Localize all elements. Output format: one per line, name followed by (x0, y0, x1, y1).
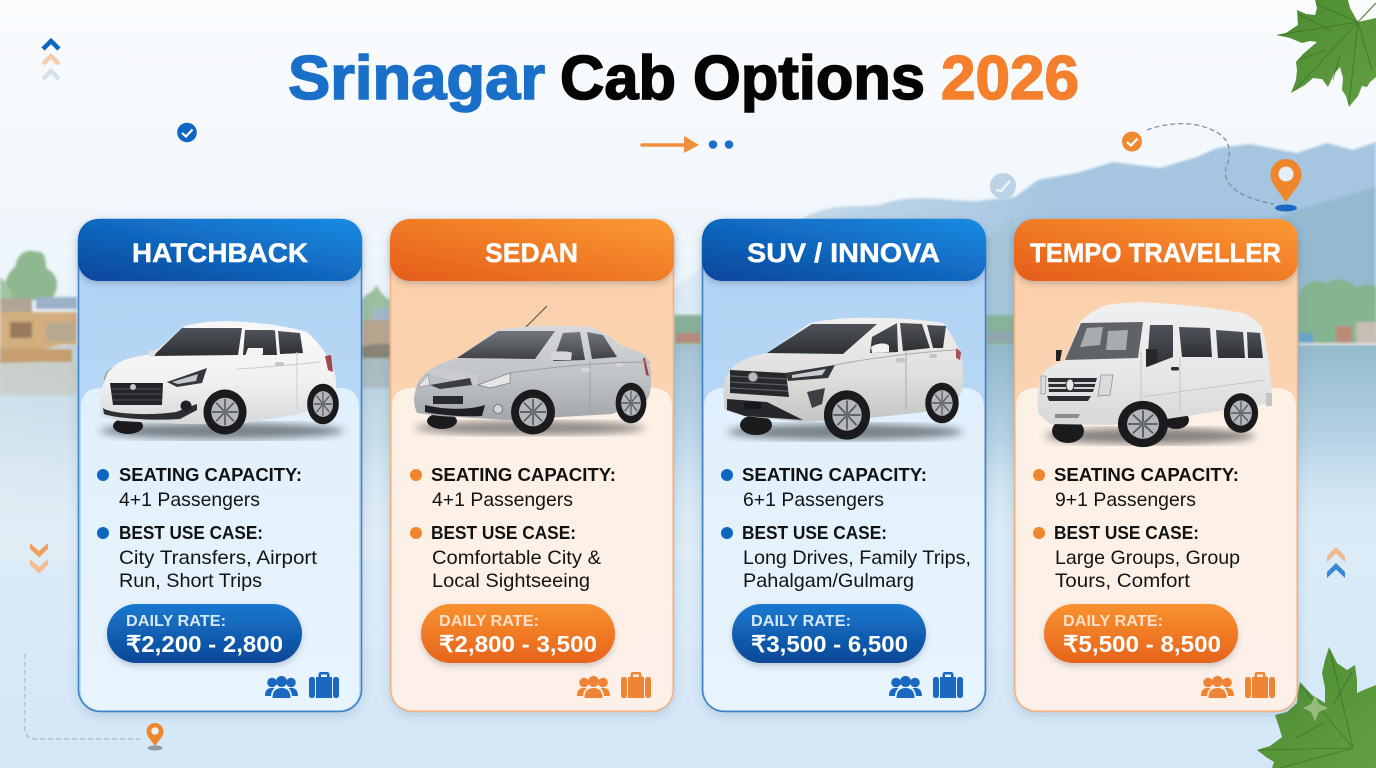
seating capacity: 9+1 Passengers (1055, 489, 1196, 511)
seating capacity (97, 465, 302, 511)
daily rate pill: ₹3,500 - 6,500 (751, 631, 908, 657)
dashed route to pin (1147, 124, 1274, 204)
scenery: left trees and houseboat (0, 251, 77, 395)
best use case (721, 523, 971, 592)
best use case: City Transfers, Airport (119, 547, 318, 569)
icon: faded check badge (990, 173, 1016, 199)
leaf: bottom right (1257, 647, 1376, 768)
best use case: Long Drives, Family Trips, (743, 547, 971, 569)
icon: orange check badge (1122, 132, 1142, 152)
icon: luggage (309, 672, 339, 698)
seating capacity: 6+1 Passengers (743, 489, 884, 511)
icon: map pin top right (1270, 159, 1302, 212)
seating capacity: SEATING CAPACITY: (1054, 465, 1239, 485)
arrow and dots under title (642, 136, 733, 153)
panel: SUV / Innova (702, 219, 986, 712)
icon: map pin bottom left (146, 723, 164, 750)
daily rate pill: DAILY RATE: (1063, 613, 1163, 630)
daily rate pill (107, 604, 302, 663)
best use case: Local Sightseeing (432, 570, 590, 592)
header (390, 219, 674, 281)
header: SEDAN (485, 238, 578, 268)
header: TEMPO TRAVELLER (1030, 238, 1281, 268)
daily rate pill: DAILY RATE: (751, 613, 851, 630)
panel: tempo traveller (1014, 219, 1298, 712)
daily rate pill: ₹5,500 - 8,500 (1063, 631, 1221, 657)
seating capacity: 4+1 Passengers (119, 489, 260, 511)
daily rate pill: ₹2,800 - 3,500 (439, 631, 597, 657)
lower panel (81, 388, 359, 710)
header (702, 219, 986, 281)
seating capacity (410, 465, 616, 511)
best use case: BEST USE CASE: (1054, 523, 1199, 543)
best use case: BEST USE CASE: (431, 523, 576, 543)
title: 2026 (941, 44, 1079, 113)
lower panel (704, 388, 984, 710)
leaf: top right (1276, 0, 1376, 107)
scenery: gap between cards one and two (362, 285, 390, 388)
best use case: BEST USE CASE: (742, 523, 887, 543)
icon: chevrons top left (43, 41, 59, 79)
seating capacity: SEATING CAPACITY: (742, 465, 927, 485)
title (288, 44, 1079, 113)
header (78, 219, 362, 281)
panel: sedan (390, 219, 674, 712)
scenery: right trees and houses (1298, 280, 1376, 345)
daily rate pill: DAILY RATE: (126, 613, 226, 630)
car: silver sedan (414, 306, 651, 435)
daily rate pill: DAILY RATE: (439, 613, 539, 630)
lower panel (1016, 388, 1296, 710)
icon: blue check badge (177, 123, 197, 142)
title: Srinagar (288, 44, 545, 113)
icon: chevrons left (30, 543, 48, 574)
icon: luggage (1245, 672, 1275, 698)
dashed route bottom left (25, 654, 140, 739)
icon: people (1201, 676, 1234, 698)
seating capacity (1033, 465, 1239, 511)
best use case: BEST USE CASE: (119, 523, 263, 543)
scenery: lake (0, 345, 1376, 560)
scenery: mountains (660, 142, 1376, 345)
seating capacity: 4+1 Passengers (432, 489, 573, 511)
best use case (410, 523, 601, 592)
panel: hatchback (78, 219, 362, 712)
icon: people (577, 676, 610, 698)
icon: chevrons right (1327, 547, 1345, 578)
car: silver Innova (723, 318, 963, 440)
icon: people (265, 676, 298, 698)
scenery: gaps between cards two, three and four (674, 315, 1014, 345)
best use case: Tours, Comfort (1055, 570, 1191, 592)
header: HATCHBACK (132, 238, 309, 268)
best use case: Pahalgam/Gulmarg (743, 570, 914, 592)
best use case: Run, Short Trips (119, 570, 262, 592)
best use case: Large Groups, Group (1055, 547, 1240, 569)
seating capacity: SEATING CAPACITY: (119, 465, 302, 485)
daily rate pill (421, 604, 615, 663)
title: Cab Options (560, 44, 925, 113)
daily rate pill: ₹2,200 - 2,800 (126, 631, 283, 657)
header (1014, 219, 1298, 281)
daily rate pill (732, 604, 926, 663)
best use case: Comfortable City & (432, 547, 601, 569)
icon: luggage (933, 672, 963, 698)
car: white hatchback (100, 321, 344, 439)
vehicle: white tempo traveller (1038, 302, 1272, 447)
icon: people (889, 676, 922, 698)
icon: luggage (621, 672, 651, 698)
best use case (97, 523, 318, 592)
header: SUV / INNOVA (747, 238, 940, 268)
seating capacity (721, 465, 927, 511)
best use case (1033, 523, 1240, 592)
daily rate pill (1044, 604, 1238, 663)
lower panel (392, 388, 672, 710)
seating capacity: SEATING CAPACITY: (431, 465, 616, 485)
